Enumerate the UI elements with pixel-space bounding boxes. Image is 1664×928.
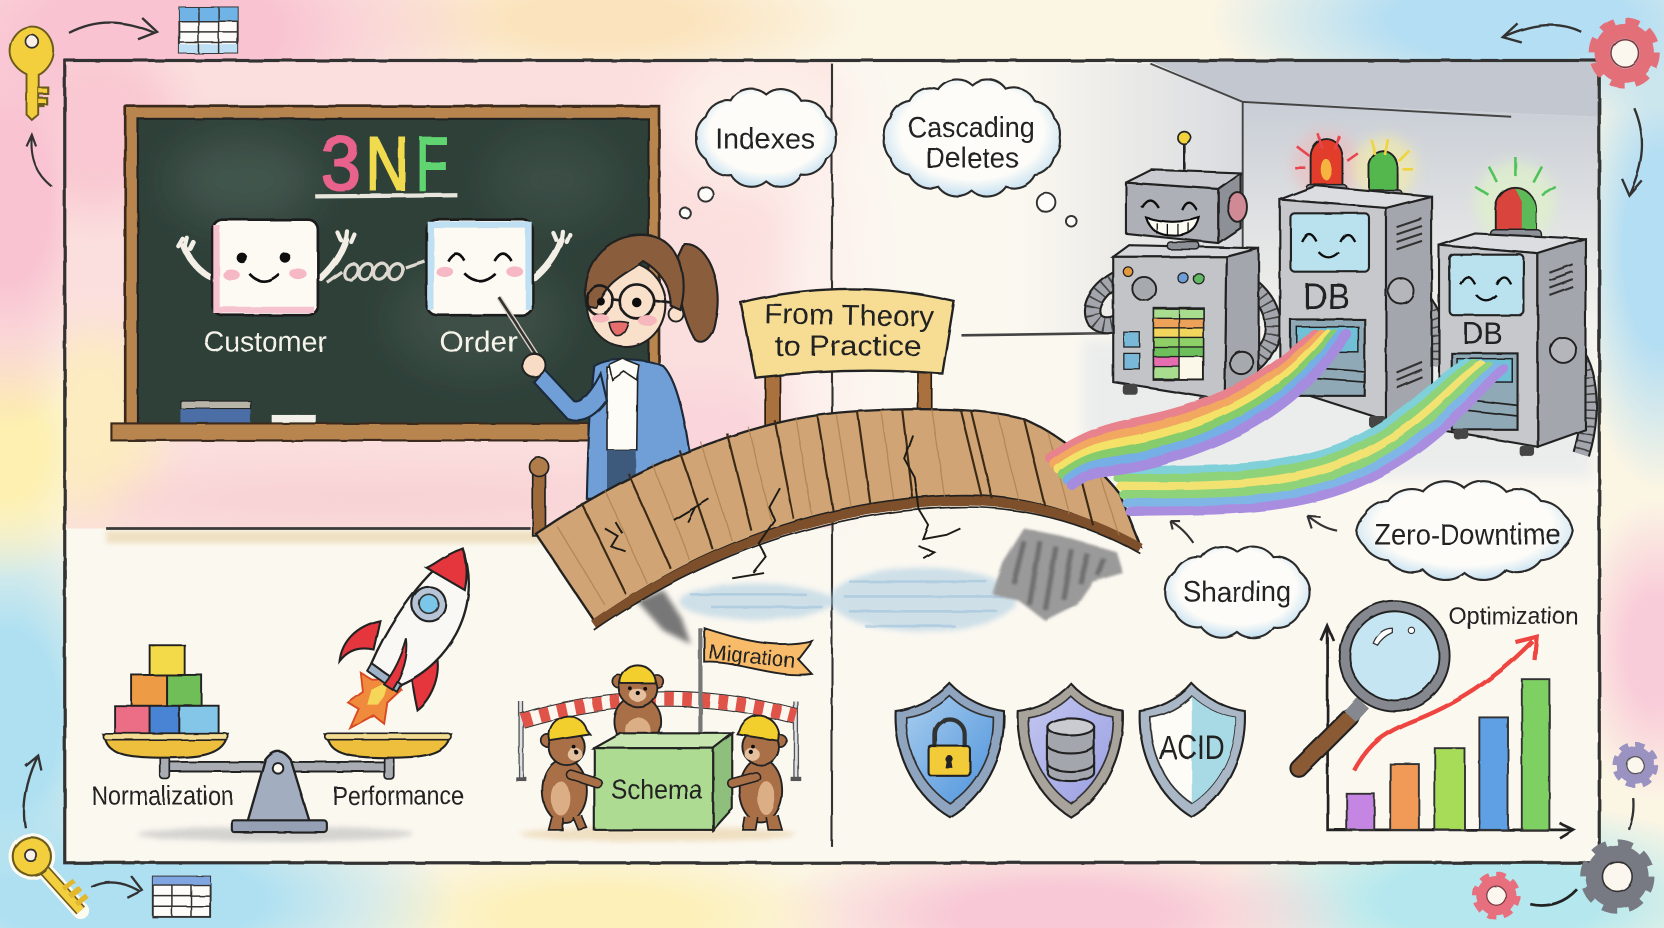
barrier — [516, 699, 801, 781]
head — [1126, 183, 1218, 243]
DB label: DB — [1303, 275, 1350, 317]
icon: red gear top right — [1596, 24, 1653, 82]
bridge post — [530, 457, 549, 536]
DB server 1 — [1280, 131, 1439, 428]
right arm — [1240, 281, 1273, 371]
warning lights — [1293, 131, 1417, 200]
connector: pink to dark gear — [1530, 889, 1577, 905]
cloud: Cascading Deletes: Cascading — [907, 112, 1035, 144]
migration flag — [705, 628, 812, 675]
cloud: Cascading Deletes: Deletes — [925, 143, 1019, 175]
drive slots — [1290, 319, 1365, 396]
rocks — [637, 528, 1123, 644]
magnifying glass — [1299, 601, 1450, 768]
customer table character — [178, 220, 354, 315]
bridge — [530, 409, 1141, 630]
robot — [1092, 132, 1273, 408]
body — [371, 549, 469, 684]
sign: From Theory to Practice: to Practice — [775, 331, 921, 363]
teacher — [499, 235, 718, 499]
beam — [164, 762, 389, 772]
icon: table bottom left — [153, 877, 210, 917]
drive slots — [1452, 353, 1518, 430]
shield: ACID — [1140, 683, 1245, 817]
growth arrow — [1354, 641, 1532, 770]
head — [587, 262, 665, 347]
top bear — [612, 665, 663, 747]
arm — [1401, 287, 1439, 366]
chalk sticks — [272, 415, 316, 422]
arrow: key to table — [69, 18, 157, 39]
icon: pink gear bottom — [1477, 877, 1515, 915]
body — [1113, 245, 1259, 257]
3NF heading — [320, 122, 448, 207]
rocket — [340, 549, 469, 728]
migration flag: Migration — [708, 641, 797, 673]
screen — [1450, 255, 1524, 315]
cloud: Sharding: Sharding — [1183, 577, 1292, 609]
centre divider — [831, 64, 833, 847]
bars — [1347, 679, 1549, 830]
connector: purple to dark gear — [1629, 798, 1634, 830]
cracks — [605, 435, 960, 578]
customer label: Customer — [204, 326, 327, 358]
rainbow data ribbon 1 — [1051, 334, 1347, 485]
optimization bar chart — [1299, 601, 1578, 838]
normalization label: Normalization — [91, 782, 233, 810]
icon: purple gear — [1617, 747, 1653, 783]
chalkboard — [111, 106, 659, 440]
sign: From Theory to Practice — [741, 289, 954, 427]
pointer — [499, 297, 536, 354]
performance label: Performance — [332, 782, 464, 810]
flag pole — [698, 628, 702, 734]
padlock — [929, 720, 970, 776]
sign: From Theory to Practice: From Theory — [764, 298, 935, 333]
arrow: up from bottom key — [24, 756, 41, 828]
classroom pink wall — [66, 62, 832, 546]
chalk tray — [111, 423, 589, 440]
arrow: left up to key — [27, 135, 52, 187]
DB label: DB — [1462, 315, 1503, 351]
schema box — [594, 733, 732, 830]
icon: yellow key bottom left — [8, 833, 87, 911]
optimization label: Optimization — [1449, 603, 1578, 630]
warning light — [1475, 157, 1556, 242]
migration scene — [516, 628, 812, 842]
icon: yellow key top left — [10, 27, 53, 120]
flame — [348, 673, 401, 728]
icon: table top left — [179, 7, 238, 53]
order label: Order — [439, 326, 518, 358]
left bear — [541, 716, 597, 830]
left fin — [340, 621, 380, 661]
cardigan and shirt — [587, 359, 692, 499]
cloud: Cascading Deletes — [884, 79, 1076, 226]
database cylinders — [1047, 718, 1094, 781]
order table character — [427, 220, 570, 315]
cloud: Indexes: Indexes — [715, 124, 815, 156]
left arm — [1092, 278, 1141, 325]
icon: dark gear bottom right — [1588, 847, 1647, 906]
3NF heading: 3 — [320, 122, 361, 207]
panel frame — [65, 60, 1599, 863]
right pan — [325, 734, 451, 758]
shield: lock — [896, 683, 1004, 817]
blocks — [115, 645, 219, 733]
arrow to ribbon — [1307, 516, 1337, 531]
screen — [1290, 213, 1369, 272]
left pan — [103, 734, 228, 758]
chain link — [327, 261, 424, 282]
cloud: Indexes — [680, 89, 836, 219]
DB server 2 — [1439, 157, 1589, 456]
arm — [1560, 340, 1589, 454]
schema box: Schema — [611, 774, 703, 805]
arrow to bridge — [1171, 521, 1194, 543]
cloud: Sharding — [1165, 547, 1310, 638]
right bear — [732, 716, 786, 830]
arrow: key to table bottom — [91, 877, 142, 898]
eraser — [180, 401, 250, 422]
centre fin — [384, 639, 407, 690]
ponytail — [677, 244, 718, 342]
rainbow data ribbon 2 — [1114, 363, 1504, 512]
cloud: Zero-Downtime — [1356, 481, 1573, 580]
buttons — [1123, 267, 1133, 276]
arrow: gear downward — [1622, 108, 1642, 195]
water under bridge — [679, 568, 1017, 631]
fulcrum — [247, 751, 310, 822]
3NF heading: N — [366, 122, 409, 207]
cloud: Zero-Downtime: Zero-Downtime — [1374, 518, 1561, 551]
shield: ACID: ACID — [1159, 729, 1225, 767]
antenna — [1183, 143, 1186, 170]
window — [412, 587, 446, 621]
data table panel — [1154, 308, 1203, 380]
server room walls — [961, 62, 1598, 478]
axes — [1321, 626, 1574, 838]
glasses — [587, 284, 671, 318]
right fin — [412, 658, 438, 710]
arrow: gear leftward — [1503, 23, 1581, 42]
hand — [1132, 277, 1156, 300]
pointing arm — [534, 369, 607, 421]
shield: database — [1018, 683, 1123, 817]
scale balance — [91, 645, 464, 842]
3NF heading: F — [416, 122, 448, 207]
